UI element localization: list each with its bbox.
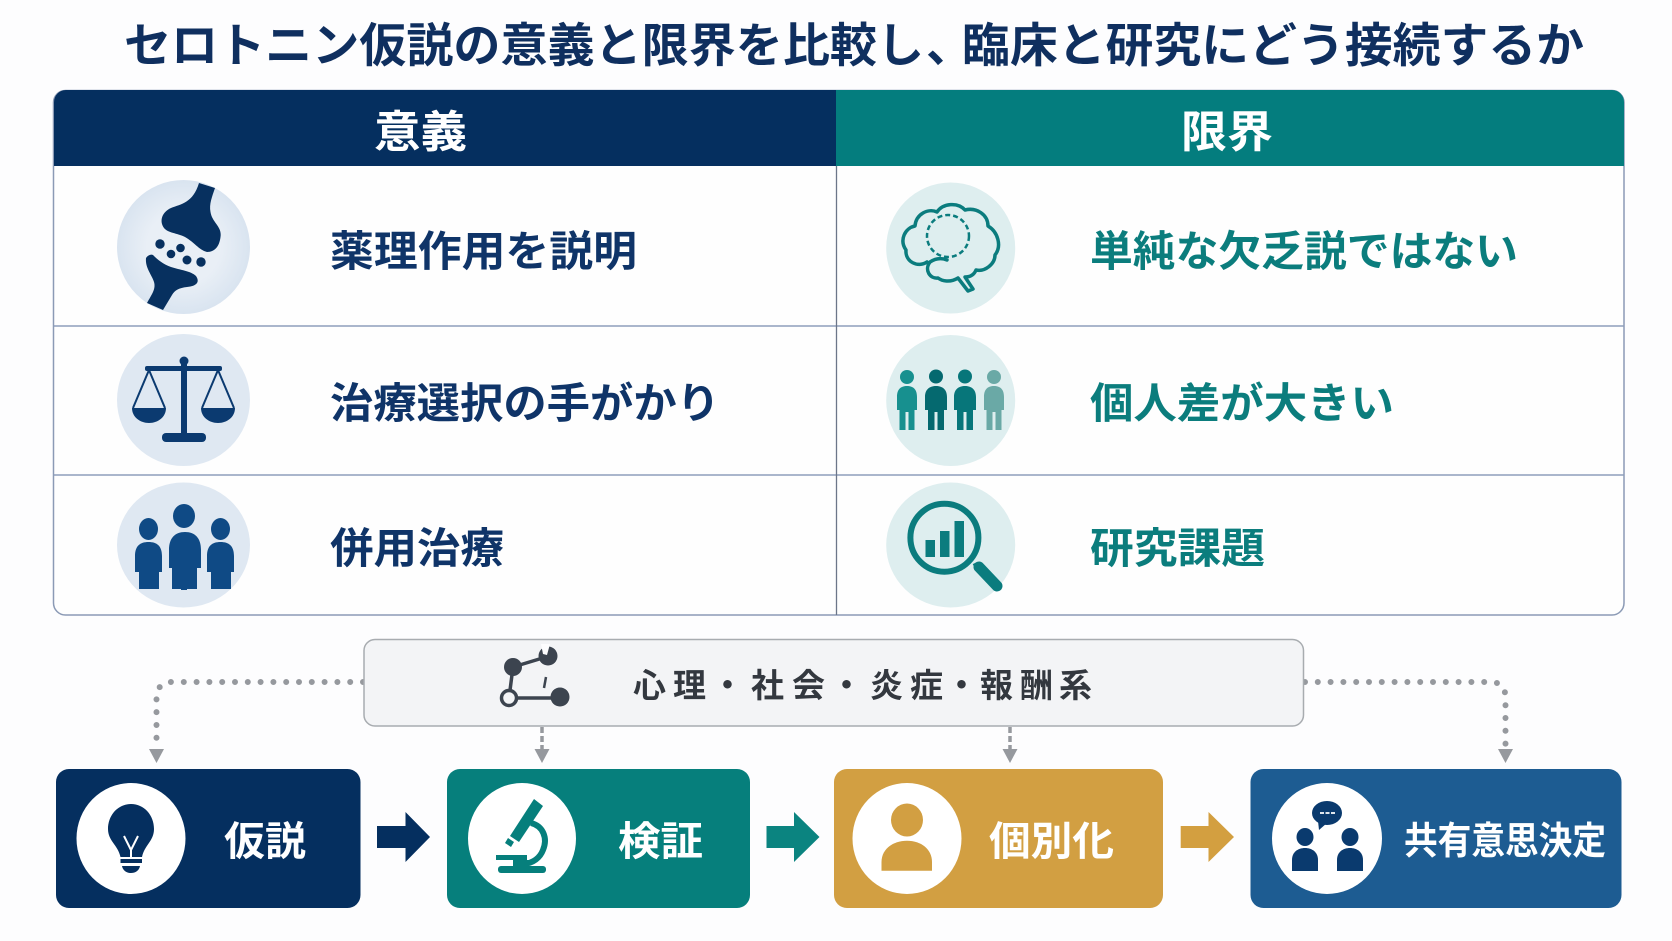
header: significance: 意義 xyxy=(374,108,467,157)
header: limits: 限界 xyxy=(1181,108,1273,157)
label: personalization: 個別化 xyxy=(989,820,1114,864)
connector: centre-right arrow xyxy=(1002,727,1018,763)
icon: four people xyxy=(886,335,1015,466)
icon: two people talking xyxy=(1292,801,1363,871)
step: shared decision making xyxy=(1250,769,1622,908)
connector: centre-left arrow xyxy=(534,727,550,763)
label: research issues: 研究課題 xyxy=(1090,525,1265,572)
header: limits xyxy=(836,90,1624,166)
step: hypothesis xyxy=(56,769,360,908)
label: treatment selection: 治療選択の手がかり xyxy=(330,380,720,427)
label: pharmacology: 薬理作用を説明 xyxy=(330,228,637,275)
row: not a simple deficiency xyxy=(886,182,1518,314)
icon: network nodes xyxy=(502,644,570,706)
icon: microscope xyxy=(496,799,546,873)
panel: comparison table xyxy=(54,90,1624,615)
icon: brain xyxy=(886,182,1015,314)
step: personalization xyxy=(834,769,1163,908)
row: treatment selection xyxy=(117,334,720,466)
step: verification xyxy=(447,769,750,908)
icon: three people xyxy=(117,482,250,608)
label: combination therapy: 併用治療 xyxy=(330,525,504,572)
label: individual differences: 個人差が大きい xyxy=(1090,380,1394,427)
label: hypothesis: 仮説 xyxy=(224,820,306,864)
title: 臨床と研究にどう接続するか xyxy=(962,19,1584,72)
icon: magnifier with bars xyxy=(886,482,1015,608)
connector: left dotted arrow xyxy=(149,682,363,763)
title: 、 xyxy=(926,19,973,72)
icon: person xyxy=(882,804,932,871)
label: verification: 検証 xyxy=(618,820,703,864)
label: not a simple deficiency: 単純な欠乏説ではない xyxy=(1090,228,1518,275)
icon: synapse xyxy=(117,180,250,314)
title xyxy=(124,19,1584,72)
row: research issues xyxy=(886,482,1265,608)
arrow: verification to personalization xyxy=(766,812,820,862)
row: individual differences xyxy=(886,335,1394,466)
panel: cross-cutting factors xyxy=(364,640,1304,726)
arrow: hypothesis to verification xyxy=(377,812,430,862)
row: pharmacology xyxy=(117,180,637,314)
header: significance xyxy=(54,90,836,166)
arrow: personalization to shared decision xyxy=(1181,812,1234,862)
connector: right dotted arrow xyxy=(1305,682,1513,763)
label: shared decision making: 共有意思決定 xyxy=(1404,821,1606,863)
title: セロトニン仮説の意義と限界を比較し xyxy=(124,19,924,72)
icon: light bulb xyxy=(108,804,154,873)
icon: balance scale xyxy=(117,334,250,466)
label: psychological, social, inflammatory, reward systems: 心理・社会・炎症・報酬系 xyxy=(633,667,1092,704)
row: combination therapy xyxy=(117,482,504,608)
